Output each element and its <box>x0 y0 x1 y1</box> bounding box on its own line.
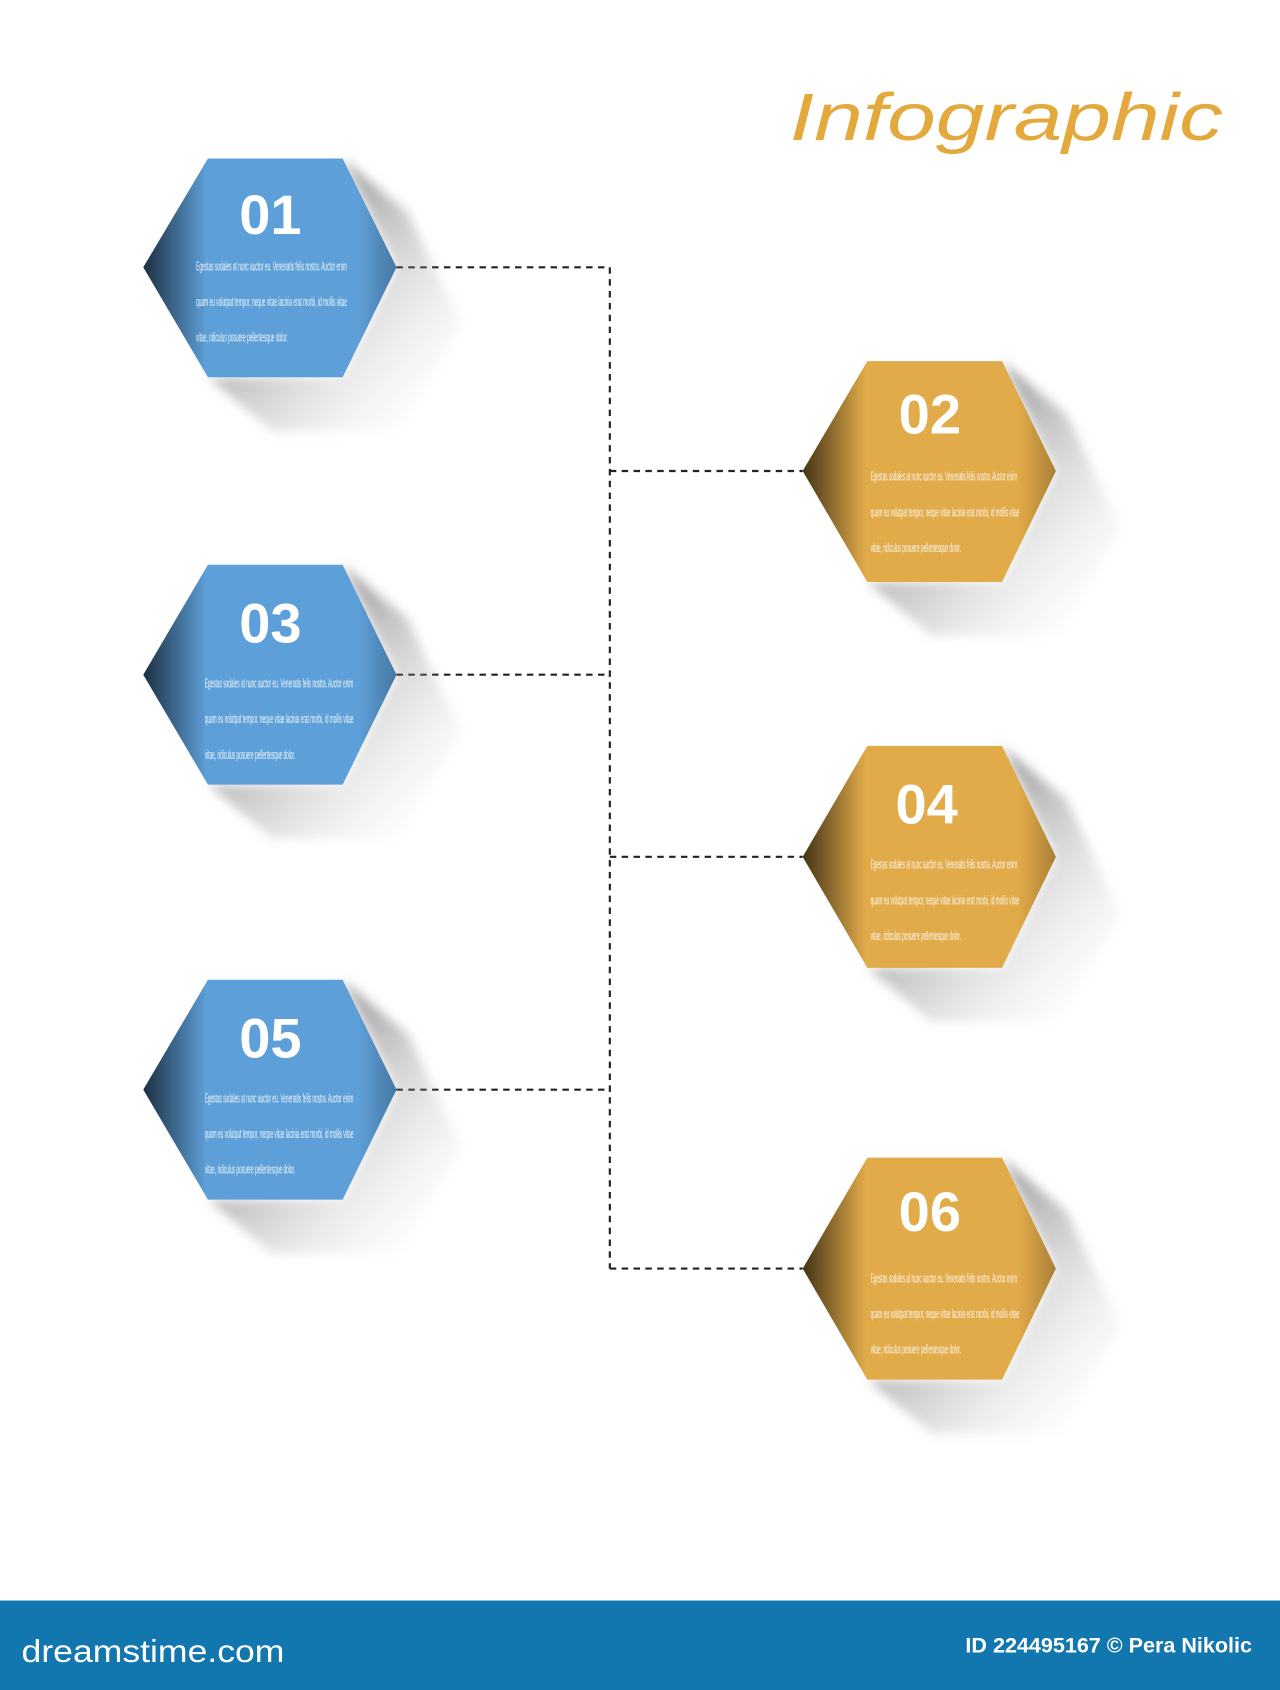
hexagon 05 <box>143 980 461 1253</box>
hexagon 01: quam eu volutpat tempor, neque vitae lacinia erat morbi, id mollis vitae <box>196 294 347 309</box>
hexagon 05: 05 <box>239 1006 302 1069</box>
hexagon 06 <box>803 1158 1121 1433</box>
hexagon 01: vitae, ridiculus posuere pellentesque dolor. <box>196 330 288 345</box>
hexagon 03: quam eu volutpat tempor, neque vitae lacinia erat morbi, id mollis vitae <box>205 711 353 726</box>
footer bar: dreamstime.com <box>22 1634 284 1669</box>
hexagon 06: 06 <box>899 1180 961 1243</box>
hexagon 03: 03 <box>239 591 302 654</box>
title: Infographic <box>790 81 1223 155</box>
hexagon 05: vitae, ridiculus posuere pellentesque dolor. <box>205 1162 295 1177</box>
hexagon 06: Egestas sodales at nunc auctor eu. Venenatis felis nostra. Auctor enim <box>871 1271 1017 1286</box>
hexagon 03 <box>143 565 461 839</box>
hexagon 06: quam eu volutpat tempor, neque vitae lacinia erat morbi, id mollis vitae <box>871 1306 1019 1321</box>
hexagon 05: Egestas sodales at nunc auctor eu. Venenatis felis nostra. Auctor enim <box>205 1091 353 1106</box>
footer bar: ID 224495167 © Pera Nikolic <box>965 1632 1252 1657</box>
hexagon 01: 01 <box>239 183 302 246</box>
connector lines <box>396 267 803 1269</box>
hexagon 02: 02 <box>899 382 961 445</box>
footer bar <box>0 1601 1280 1690</box>
hexagon 02: quam eu volutpat tempor, neque vitae lacinia erat morbi, id mollis vitae <box>871 504 1019 519</box>
hexagon 02: vitae, ridiculus posuere pellentesque dolor. <box>871 540 961 555</box>
hexagon 04: vitae, ridiculus posuere pellentesque dolor. <box>871 928 961 943</box>
hexagon 04: quam eu volutpat tempor, neque vitae lacinia erat morbi, id mollis vitae <box>871 892 1019 907</box>
hexagon 01: Egestas sodales at nunc auctor eu. Venenatis felis nostra. Auctor enim <box>196 259 347 274</box>
hexagon 03: vitae, ridiculus posuere pellentesque dolor. <box>205 747 295 762</box>
hexagon 06: vitae, ridiculus posuere pellentesque dolor. <box>871 1342 961 1357</box>
hexagon 04 <box>803 746 1121 1022</box>
hexagon 04: Egestas sodales at nunc auctor eu. Venenatis felis nostra. Auctor enim <box>871 857 1017 872</box>
hexagon 05: quam eu volutpat tempor, neque vitae lacinia erat morbi, id mollis vitae <box>205 1126 353 1141</box>
hexagon 01 <box>143 158 461 431</box>
hexagon 03: Egestas sodales at nunc auctor eu. Venenatis felis nostra. Auctor enim <box>205 676 353 691</box>
hexagon 02 <box>803 361 1121 636</box>
hexagon 04: 04 <box>895 772 958 835</box>
hexagon 02: Egestas sodales at nunc auctor eu. Venenatis felis nostra. Auctor enim <box>871 469 1017 484</box>
